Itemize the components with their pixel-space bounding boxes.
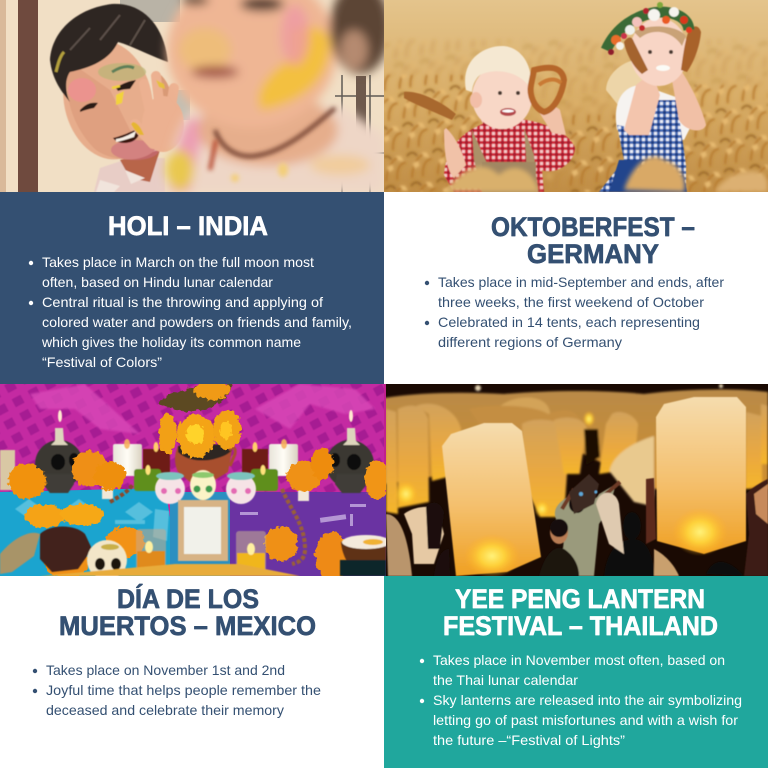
bullet list: Holi facts: [29, 254, 352, 370]
heading: Oktoberfest: OKTOBERFEST –: [491, 212, 695, 242]
heading: Día de los Muertos: [59, 583, 316, 641]
back lanterns: [384, 384, 768, 518]
bullet list: Yee Peng facts: Sky lanterns are released into the air symbolizing: [433, 692, 742, 708]
panel: Holi – India: [0, 192, 384, 384]
table cloths: [0, 488, 180, 576]
bullet list: Oktoberfest facts: three weeks, the first weekend of October: [438, 294, 704, 310]
bullet list: Holi facts: which gives the holiday its common name: [41, 334, 301, 350]
heading: Oktoberfest: GERMANY: [527, 239, 659, 269]
bullet list: Oktoberfest facts: [425, 274, 724, 350]
bullet list: Holi facts: often, based on Hindu lunar calendar: [42, 274, 273, 290]
heading: Yee Peng: [443, 584, 718, 641]
bullet list: Oktoberfest facts: different regions of Germany: [438, 334, 622, 350]
jars: [40, 526, 92, 572]
bullet list: Yee Peng facts: letting go of past misfortunes and with a wish for: [433, 712, 738, 728]
marigolds: [8, 380, 389, 580]
photo: Yee Peng sky lanterns: [384, 384, 768, 578]
beads: [110, 484, 133, 502]
bullet list: Holi facts: Takes place in March on the full moon most: [42, 254, 314, 270]
panel: Yee Peng Lantern Festival – Thailand: [384, 576, 768, 768]
bullet list: Holi facts: Central ritual is the throwing and applying of: [42, 294, 323, 310]
pale far left candle: [0, 450, 15, 490]
bullet list: Holi facts: “Festival of Colors”: [42, 354, 162, 370]
kid right: [599, 2, 706, 192]
heading: Yee Peng: YEE PENG LANTERN: [455, 584, 705, 614]
bullet list: Yee Peng facts: the future –“Festival of Lights”: [433, 732, 625, 748]
bullet list: Oktoberfest facts: Takes place in mid-September and ends, after: [438, 274, 724, 290]
corn husk: [0, 533, 40, 574]
people: [386, 474, 768, 576]
skulls: [35, 440, 83, 488]
vase: [175, 443, 232, 484]
bullet list: Yee Peng facts: Takes place in November most often, based on: [433, 652, 725, 668]
heading: Día de los Muertos: DÍA DE LOS: [117, 583, 259, 614]
bullet list: Día de los Muertos facts: Takes place on November 1st and 2nd: [46, 662, 285, 678]
bullet list: Día de los Muertos facts: Joyful time that helps people remember the: [46, 682, 321, 698]
panel: Día de los Muertos – Mexico: [0, 576, 384, 768]
bullet list: Día de los Muertos facts: deceased and celebrate their memory: [46, 702, 284, 718]
bowl candle: [341, 536, 386, 576]
bottom runner: [40, 564, 300, 576]
bullet list: Yee Peng facts: the Thai lunar calendar: [433, 672, 578, 688]
photo: Día de los Muertos altar: [0, 379, 391, 580]
white pillar candles: [113, 444, 142, 476]
green candles: [134, 469, 161, 491]
small white candles: [102, 482, 113, 499]
panel: Oktoberfest – Germany: [384, 192, 768, 384]
photo: Holi children covered in coloured powder: [0, 0, 390, 192]
picture frame: [178, 500, 228, 561]
sliver of altar colour at the lantern photo edge: [384, 384, 386, 464]
kid left: [404, 46, 575, 192]
sugar skulls: [155, 474, 185, 504]
bullet list: Día de los Muertos facts: [33, 662, 321, 718]
heading: Holi: HOLI – INDIA: [108, 211, 268, 241]
heading: Oktoberfest: [491, 212, 695, 269]
front lantern left: [442, 423, 541, 578]
bullet list: Oktoberfest facts: Celebrated in 14 tents, each representing: [438, 314, 700, 330]
dark red candles: [143, 449, 170, 475]
hand on cheek: [142, 96, 184, 152]
front lantern right: [656, 397, 746, 556]
heading: Yee Peng: FESTIVAL – THAILAND: [443, 611, 718, 641]
tall flames: [58, 410, 62, 422]
bullet list: Holi facts: colored water and powders on friends and family,: [42, 314, 352, 330]
photo: Oktoberfest children with pretzels in a wheat field: [384, 0, 768, 192]
heading: Día de los Muertos: MUERTOS – MEXICO: [59, 611, 316, 641]
bullet list: Yee Peng facts: [420, 652, 742, 748]
foreground skull: [87, 540, 127, 580]
